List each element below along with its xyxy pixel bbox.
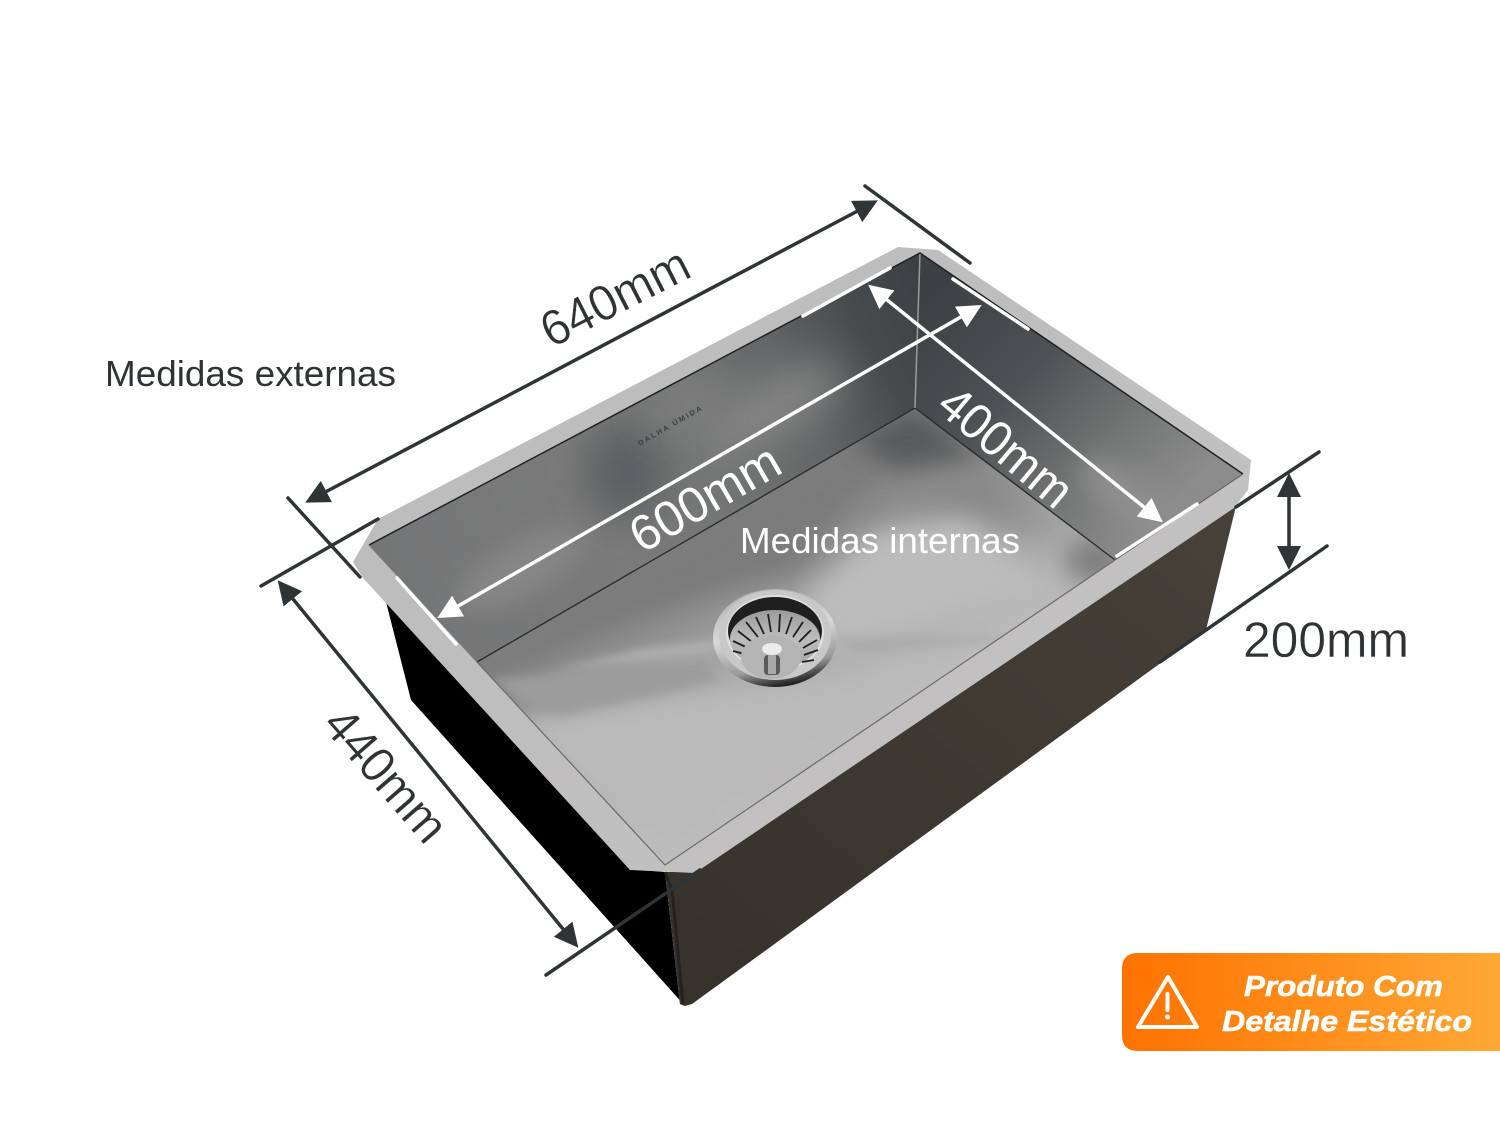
floor shading: left highlight streak	[566, 640, 714, 670]
badge text	[1222, 971, 1472, 1038]
arrow: 440mm external depth	[284, 588, 572, 940]
sink rim	[353, 247, 1251, 873]
arrow: 600mm internal width	[446, 310, 973, 613]
label: Medidas internas: Medidas internas	[740, 520, 1020, 561]
drain slots	[733, 614, 818, 662]
inner back-right wall	[915, 253, 1243, 560]
label: 600mm: 600mm	[620, 433, 790, 563]
dark exterior dimension ticks	[261, 186, 1327, 975]
floor edge lines	[369, 253, 1243, 865]
label: 640mm: 640mm	[531, 236, 699, 358]
floor shading: bright right facet	[802, 512, 1020, 638]
drain stopper	[764, 655, 780, 675]
floor shading: right streak	[850, 639, 954, 649]
floor shading: dark upper corner	[850, 408, 985, 470]
floor shading: upper-left band	[682, 515, 828, 596]
icon: warning triangle	[1138, 977, 1197, 1027]
drain	[713, 589, 837, 687]
inner back-left wall	[369, 253, 920, 662]
sink left outer side	[385, 598, 685, 1006]
floor shading: darker band under left highlight	[496, 670, 712, 714]
floor shading: lower facet	[524, 691, 786, 790]
arrow: 400mm internal depth	[876, 291, 1155, 516]
white interior dimension guides	[397, 268, 1197, 644]
arrow: 640mm external width	[314, 205, 869, 498]
badge: aesthetic detail product	[1122, 953, 1500, 1051]
label: 400mm: 400mm	[927, 375, 1085, 519]
label: 440mm: 440mm	[312, 696, 460, 854]
badge text: Produto Com	[1244, 971, 1443, 1003]
floor shading: right corner	[1065, 536, 1125, 584]
brand mark: DALHA ÚMIDA	[636, 404, 704, 448]
label: Medidas externas: Medidas externas	[105, 353, 396, 394]
floor shading: right upper tone	[944, 475, 1062, 546]
sink illustration	[353, 247, 1251, 1006]
sink corner highlight	[665, 872, 683, 1004]
infographic: sink dimensions	[108, 184, 1500, 1051]
inner floor	[478, 409, 1114, 802]
arrow: 200mm height	[1287, 483, 1291, 560]
badge text: Detalhe Estético	[1222, 1006, 1472, 1038]
sink right outer side	[665, 506, 1236, 1006]
label: 200mm: 200mm	[1243, 612, 1409, 668]
